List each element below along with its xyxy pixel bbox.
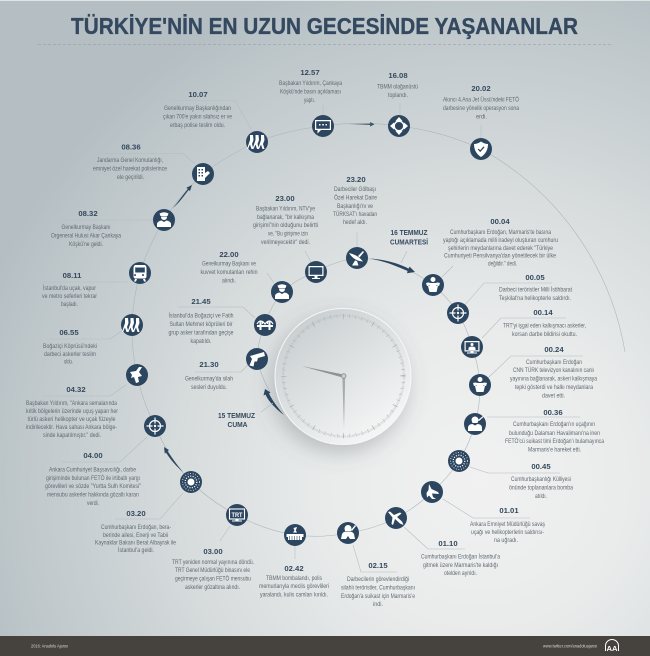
description 00.36: FETÖ'cü suikast timi Erdoğan'ı bulamayınca (505, 438, 605, 445)
time 01.01: 01.01 (499, 506, 519, 515)
description 02.42: TBMM bombalandı, polis (266, 576, 322, 582)
connector 00.36 (487, 416, 580, 418)
hour hand (302, 366, 344, 378)
clock face (275, 308, 411, 444)
connector 01.01 (443, 499, 530, 518)
top edge strip (0, 0, 650, 1)
description 23.20: TÜRKSAT'ı havadan (333, 211, 377, 218)
icon: fighter jet (421, 481, 443, 503)
description 00.04: şehirlerin meydanlarına davet ederek "Türkiye (448, 246, 554, 252)
date label: 15 Temmuz Cuma: 15 TEMMUZ (218, 411, 256, 420)
description 01.10 (421, 554, 501, 577)
description 23.00: bağlanarak, "bir kalkışma (257, 215, 315, 221)
description 12.57: Başbakan Yıldırım, Çankaya (279, 81, 343, 87)
connector 20.02 (480, 125, 482, 138)
icon: jet strike (126, 364, 148, 386)
icon: satellite dish (346, 247, 368, 269)
icon: explosion burst (448, 450, 470, 472)
event 00.36 (464, 408, 605, 454)
description 08.36: Jandarma Genel Komutanlığı, (97, 158, 163, 164)
connector 00.14 (482, 318, 566, 338)
footer bar (0, 636, 650, 656)
description 23.00: girişimi"nin olduğunu belirtti (253, 223, 318, 229)
connector 10.07 (173, 100, 252, 131)
footer (0, 636, 650, 656)
event 00.04 (422, 217, 558, 296)
time 12.57: 12.57 (300, 68, 320, 77)
time 04.00: 04.00 (83, 451, 103, 460)
description 21.45: grup asker tarafından geçişe (168, 330, 234, 336)
description 10.07 (163, 106, 233, 129)
connector 04.32 (43, 385, 126, 396)
description 00.36 (505, 422, 605, 454)
description 22.00 (200, 262, 258, 284)
icon: pistol (246, 348, 268, 370)
description 00.04: Cumhurbaşkanı Erdoğan, Marmaris'te basına (450, 230, 552, 236)
description 08.32: Orgeneral Hulusi Akar Çankaya (51, 234, 122, 240)
description 04.00: verdi. (87, 501, 99, 507)
icon: marching people (246, 131, 268, 153)
description 00.24: CNN TÜRK televizyon kanalının canlı (513, 367, 594, 374)
description 04.32: sinde kapatılmıştır." dedi. (43, 433, 101, 439)
date label: 16 Temmuz Cumartesi: CUMARTESİ (390, 238, 428, 246)
description 06.55 (43, 344, 97, 366)
description 00.24: yayınına bağlanarak, askeri kalkışmaya (510, 376, 598, 382)
time 08.11: 08.11 (63, 271, 82, 280)
description 08.11: İstanbul'da uçak, vapur (43, 285, 96, 292)
icon: train (129, 262, 151, 284)
connector 00.04 (442, 266, 453, 277)
description 20.02 (443, 96, 520, 120)
description 00.04 (443, 230, 558, 268)
connector 23.00 (305, 251, 311, 262)
description 10.07: çıkan 700'e yakın silahsız er ve (163, 114, 233, 120)
description 06.55: oldu. (64, 360, 73, 366)
icon: Anadolu Agency logo (606, 640, 618, 653)
date label: 16 Temmuz Cumartesi (390, 228, 428, 263)
description 01.01 (470, 522, 545, 544)
event 03.20 (95, 471, 202, 554)
footer url: www.twitter.com/anadoluajansi (543, 644, 597, 648)
description 08.11 (42, 285, 97, 308)
time 00.36: 00.36 (543, 408, 563, 417)
description 03.00 (172, 560, 254, 591)
connector 08.11 (43, 281, 128, 283)
description 08.32 (51, 225, 122, 248)
description 08.36: emniyet özel harekat polislerince (93, 166, 168, 172)
connector 22.00 (267, 273, 274, 283)
event 02.42 (259, 524, 329, 598)
description 02.42: memurlarıyla meclis görevlileri (259, 584, 329, 590)
arrow: 12.57 to 16.08 (348, 122, 374, 127)
description 04.00 (45, 468, 141, 507)
description 02.15 (341, 577, 416, 608)
description 04.32 (26, 401, 118, 439)
icon: parliament bombed (284, 524, 306, 546)
icon: marching people (121, 314, 143, 336)
time 00.04: 00.04 (490, 217, 510, 226)
icon: TRT screen: TRT (232, 513, 243, 519)
time 21.30: 21.30 (199, 360, 219, 369)
connector 00.24 (488, 356, 583, 378)
description 03.00: TRT yeniden normal yayınına döndü. (172, 560, 254, 566)
description 01.10: otelden ayrıldı. (444, 571, 477, 577)
description 21.45: İstanbul'da Boğaziçi ve Fatih (168, 312, 234, 320)
description 21.45: kapatıldı. (190, 339, 212, 345)
icon: speaker at podium (469, 374, 491, 396)
description 00.45: Cumhurbaşkanlığı Külliyesi (511, 477, 571, 483)
event 01.10 (385, 507, 501, 577)
spiral timeline path (132, 123, 625, 536)
description 04.00: Ankara Cumhuriyet Başsavcılığı, darbe (49, 468, 137, 474)
event 21.30 (185, 348, 268, 391)
description 23.20: Özel Harekat Daire (334, 194, 378, 202)
description 08.36: ele geçirildi. (117, 175, 144, 181)
description 04.32: Başbakan Yıldırım, "Ankara semalarında (26, 401, 118, 407)
icon: explosion burst (180, 471, 202, 493)
description 00.36: Marmaris'e hareket etti. (528, 448, 581, 454)
arrow: 03.20 to 04.00 (164, 447, 183, 472)
description 03.20: Kaynaklar Bakanı Berat Albayrak ile (95, 540, 177, 546)
minute hand (342, 376, 345, 428)
connector 21.30 (195, 365, 248, 372)
description 22.00: kuvvet komutanları rehin (200, 270, 258, 276)
event 23.20 (333, 175, 378, 269)
event 08.36 (93, 142, 214, 185)
connector 12.57 (322, 105, 324, 115)
description 00.45: atıldı. (535, 494, 547, 500)
arrow: into 21.30 from clock (264, 389, 284, 415)
event 01.01 (421, 481, 545, 544)
description 00.14 (503, 324, 586, 338)
date label: 15 Temmuz Cuma: CUMA (228, 420, 248, 429)
icon: crosshair (144, 415, 166, 437)
event 16.08 (377, 71, 418, 137)
time 16.08: 16.08 (388, 71, 408, 80)
description 22.00: alındı. (222, 278, 236, 284)
description 03.20 (95, 525, 177, 554)
description 02.15: Erdoğan'a suikast için Marmaris'e (341, 594, 416, 600)
clock pivot (341, 374, 346, 378)
description 10.07: Genelkurmay Başkanlığından (164, 106, 231, 112)
description 12.57: yaptı. (304, 98, 315, 104)
description 00.14: korsan darbe bildirisi okuttu. (512, 332, 577, 338)
time 08.36: 08.36 (121, 142, 141, 152)
time 00.05: 00.05 (525, 273, 545, 282)
time 06.55: 06.55 (59, 328, 79, 337)
description 20.02: darbesine yönelik operasyon sona (443, 106, 520, 112)
time 00.14: 00.14 (533, 308, 553, 317)
description 00.05: Darbeci teröristler Milli İstihbarat (499, 286, 572, 294)
icon: airplane (385, 507, 407, 529)
event 21.45 (168, 297, 276, 345)
description 00.45 (509, 477, 574, 500)
description 00.14: TRT'yi işgal eden kalkışmacı askerler, (503, 324, 586, 330)
description 02.15: Darbecilerin görevlendirdiği (347, 577, 409, 583)
description 16.08: toplandı. (388, 93, 408, 99)
description 22.00: Genelkurmay Başkanı ve (202, 262, 257, 268)
icon: shield with check (470, 138, 492, 160)
event 23.00 (253, 194, 327, 283)
description 02.15: silahlı teröristler, Cumhurbaşkanı (341, 586, 415, 592)
icon: crosshair (447, 302, 469, 324)
description 12.57: Köşkü'nde basın açıklaması (280, 90, 341, 96)
description 12.57 (279, 81, 343, 104)
description 23.20 (333, 187, 378, 226)
event 02.15 (337, 522, 416, 608)
date label: 16 Temmuz Cumartesi: 16 TEMMUZ (390, 228, 428, 237)
time 23.20: 23.20 (346, 175, 366, 184)
arrow: 23.20 to 00.04 (370, 258, 415, 273)
description 01.01: uçağı ve helikopterlerin saldırısı- (471, 530, 544, 536)
description 20.02: Akıncı 4.Ana Jet Üssü'ndeki FETÖ (443, 96, 519, 104)
icon: four way arrows (388, 115, 410, 137)
date label: 15 Temmuz Cuma (218, 403, 273, 429)
description 16.08 (377, 84, 418, 99)
time 02.15: 02.15 (368, 561, 388, 570)
description 06.55: darbeci askerler teslim (44, 352, 96, 358)
description 08.32: Genelkurmay Başkanı (62, 225, 111, 231)
icon: TV presenter (461, 336, 483, 358)
description 10.07: erbaş polise teslim oldu. (170, 123, 225, 129)
event 00.24 (469, 345, 598, 400)
description 20.02: erdi. (476, 114, 487, 120)
event 20.02 (443, 84, 520, 160)
icon: armed commando (337, 522, 359, 544)
description 08.11: ve metro seferleri tekrar (42, 294, 97, 300)
description 23.20: Başkanlığı'nı ve (337, 204, 374, 210)
description 04.00: görevlileri ve sözde "Yurtta Sulh Komitesi" (45, 484, 141, 490)
description 04.32: türlü askeri helikopter ve uçak füzeyle (28, 417, 116, 423)
event 06.55 (43, 314, 143, 366)
icon: speech bubble (312, 115, 334, 137)
event 08.32 (51, 209, 175, 248)
connector 00.05 (465, 283, 552, 305)
description 00.05 (499, 286, 572, 302)
event 00.45 (448, 450, 574, 500)
description 00.36: bulunduğu Dalaman Havalimanı'na inen (509, 431, 600, 437)
description 03.00: geçirmeye çalışan FETÖ mensubu (175, 576, 251, 582)
connector 08.36 (95, 154, 195, 164)
time 01.10: 01.10 (438, 539, 458, 548)
clock five minute ticks (284, 316, 404, 436)
description 04.00: mensubu askerler hakkında gözaltı kararı (47, 492, 139, 498)
icon: building (192, 163, 214, 185)
connector 04.00 (62, 437, 147, 462)
description 21.30: Genelkurmay'da silah (185, 376, 233, 382)
description 00.24: tepki gösterdi ve halkı meydanlara (515, 385, 594, 391)
description 00.04: değildir." dedi. (488, 262, 517, 268)
event 04.32 (26, 364, 148, 439)
description 23.00 (253, 206, 318, 246)
title: TÜRKİYE'NİN EN UZUN GECESİNDE YAŞANANLAR (71, 13, 578, 39)
time 04.32: 04.32 (66, 385, 86, 394)
time 10.07: 10.07 (188, 90, 208, 99)
description 00.24: davet etti. (542, 394, 565, 400)
time 08.32: 08.32 (78, 209, 98, 218)
time 20.02: 20.02 (471, 84, 491, 93)
connector 08.32 (63, 219, 153, 221)
description 04.00: girişiminde bulunan FETÖ ile irtibatlı yargı (46, 475, 140, 482)
description 03.20: Cumhurbaşkanı Erdoğan, bera- (101, 525, 171, 531)
event 10.07 (163, 90, 268, 153)
icon: speaker at podium (422, 274, 444, 296)
description 00.04: yaptığı açıklamada milli iradeyi oluşturan cumhuru (443, 238, 558, 244)
description 00.04: Cumhuriyeti Pensilvanya'dan yönetilecek bir ülke (444, 254, 557, 260)
icon: Anadolu Agency logo: AA (606, 644, 618, 653)
event 03.00 (172, 504, 254, 591)
description 21.30: sesleri duyuldu. (191, 385, 227, 391)
description 04.32: indirilecektir. Hava sahası Ankara bölge- (26, 425, 117, 431)
description 21.45: Sultan Mehmet köprüleri bir (170, 322, 232, 328)
description 08.32: Köşkü'ne geldi. (69, 242, 103, 248)
description 01.10: gitmek üzere Marmaris'te kaldığı (423, 563, 498, 569)
description 16.08: TBMM olağanüstü (377, 84, 418, 90)
time 00.24: 00.24 (544, 345, 564, 354)
event 00.05 (447, 273, 572, 324)
connector 16.08 (399, 103, 401, 115)
description 00.45: önünde toplananlara bomba (509, 486, 574, 492)
time 00.45: 00.45 (531, 462, 551, 471)
connector 03.20 (115, 493, 183, 519)
connector 02.42 (294, 546, 296, 559)
description 23.20: Darbeciler Gölbaşı (334, 187, 376, 193)
time 03.20: 03.20 (126, 509, 146, 518)
connector 03.00 (220, 526, 230, 541)
event 04.00 (45, 415, 166, 507)
time 22.00: 22.00 (219, 250, 239, 259)
description 08.11: başladı. (61, 302, 78, 308)
time 02.42: 02.42 (284, 564, 304, 573)
description 08.36 (93, 158, 168, 181)
connector 01.10 (404, 527, 465, 549)
clock hour ticks (284, 316, 403, 436)
icon: soldier (271, 281, 293, 303)
description 21.45 (168, 312, 234, 345)
description 02.42 (259, 576, 329, 598)
arrow: 08.32 to 08.36 (173, 185, 192, 208)
clock (275, 308, 411, 444)
description 03.00: TRT Genel Müdürlüğü binasını ele (175, 568, 251, 574)
footer credit: 2016: Anadolu Ajansı (31, 644, 68, 648)
description 04.32: kritik bölgelerin üzerinde uçuş yapan her (26, 409, 118, 415)
icon: monitor (305, 261, 327, 283)
connector 23.20 (356, 232, 358, 247)
description 02.15: indi. (373, 602, 383, 608)
description 00.36: Cumhurbaşkanı Erdoğan'ın uçağının (513, 422, 595, 428)
description 23.00: ve, "Bu girişime izin (268, 232, 308, 238)
description 03.00: askerler gözaltına alındı. (185, 585, 240, 591)
connector 21.45 (178, 307, 255, 318)
icon: masked commando (464, 413, 486, 435)
description 01.01: Ankara Emniyet Müdürlüğü savaş (470, 522, 545, 528)
connector 06.55 (50, 330, 123, 339)
event 08.11 (42, 262, 151, 308)
clock minor ticks (283, 316, 404, 436)
connector 00.45 (470, 467, 560, 473)
description 03.20: berinde ailesi, Enerji ve Tabii (103, 533, 168, 539)
time 21.45: 21.45 (191, 297, 211, 306)
description 23.00: Başbakan Yıldırım, NTV'ye (256, 206, 316, 212)
event 00.14 (461, 308, 586, 358)
event 12.57 (279, 68, 343, 137)
event 22.00 (200, 250, 293, 303)
description 00.05: Teşkilat'na helikopterle saldırdı. (499, 296, 571, 302)
description 01.01: na uğradı. (494, 538, 518, 544)
description 23.20: hedef aldı. (343, 220, 367, 226)
description 00.24: Cumhurbaşkanı Erdoğan (526, 360, 582, 366)
description 01.10: Cumhurbaşkanı Erdoğan İstanbul'a (421, 554, 501, 560)
description 02.42: yaralandı, kulis camları kırıldı. (260, 592, 328, 598)
connector 02.15 (353, 545, 397, 572)
icon: bridge (254, 314, 276, 336)
description 21.30 (185, 376, 233, 391)
time 23.00: 23.00 (275, 194, 295, 203)
description 23.00: verilmeyecektir" dedi. (261, 240, 310, 246)
description 03.20: İstanbul'a geldi. (118, 547, 154, 554)
time 03.00: 03.00 (203, 547, 223, 556)
description 00.24 (510, 360, 598, 400)
icon: soldier (153, 209, 175, 231)
description 06.55: Boğaziçi Köprüsü'ndeki (43, 344, 97, 350)
